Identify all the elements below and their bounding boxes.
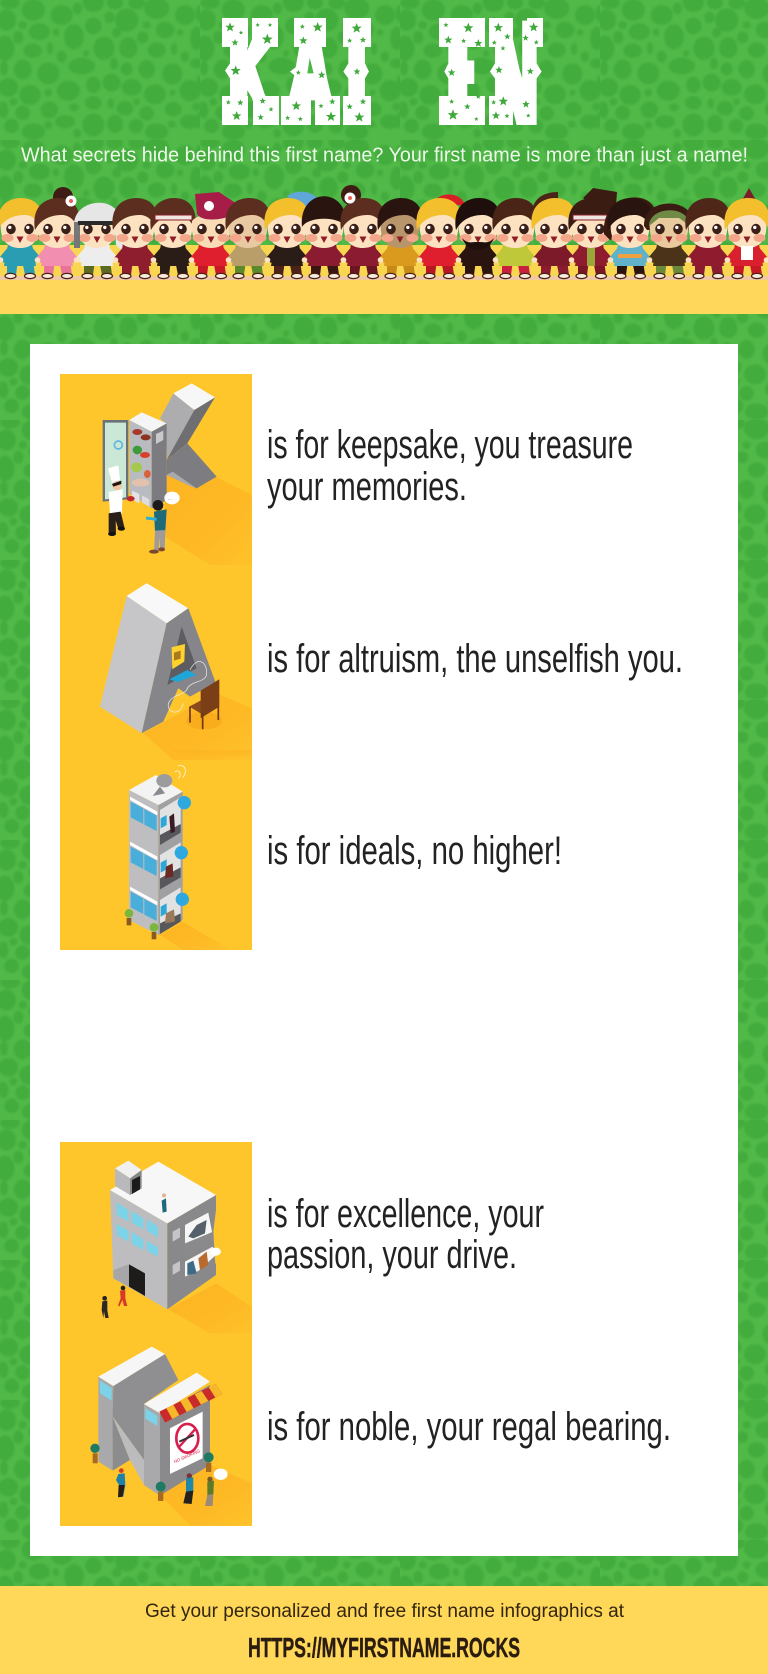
banner: row of cartoon children holding hands [0, 185, 768, 279]
text: E line [267, 1192, 544, 1277]
illustration: letter N with striped awning: NO SMOKING [173, 1448, 201, 1464]
title stars [225, 22, 539, 122]
title: KAI EN [222, 0, 543, 151]
text: K line: is for keepsake, you treasure [267, 423, 633, 467]
illustration: letter N with striped awning [90, 1347, 252, 1526]
panel: yellow image column E N [60, 1142, 252, 1526]
panel: yellow image column K A I [60, 374, 252, 950]
text: K line [267, 423, 633, 509]
title letter A [281, 0, 340, 151]
title letter stems [225, 43, 542, 125]
panel: white content card [30, 344, 738, 1556]
footer line: Get your personalized and free first name infographics at [145, 1601, 625, 1622]
title letter E [439, 0, 485, 151]
text: I line: is for ideals, no higher! [267, 829, 562, 873]
text: E line: passion, your drive. [267, 1233, 517, 1277]
banner: yellow band [0, 245, 768, 314]
illustration: letter A with laptop and chair [100, 583, 252, 760]
illustration: letter K fridge with chef and customer: ... [168, 496, 172, 501]
footer: yellow band [0, 1586, 768, 1674]
title letter I [343, 0, 371, 151]
footer URL: HTTPS://MYFIRSTNAME.ROCKS [248, 1632, 520, 1663]
text: K line: your memories. [267, 465, 467, 509]
subtitle: What secrets hide behind this first name? Your first name is more than just a name! [21, 144, 748, 166]
illustration: letter E office building [102, 1161, 252, 1333]
illustration: letter K fridge with chef and customer [103, 383, 252, 565]
title letter K [222, 0, 279, 151]
illustration: letter I office tower [125, 750, 252, 950]
text: E line: is for excellence, your [267, 1192, 544, 1236]
title letter N [489, 0, 543, 151]
